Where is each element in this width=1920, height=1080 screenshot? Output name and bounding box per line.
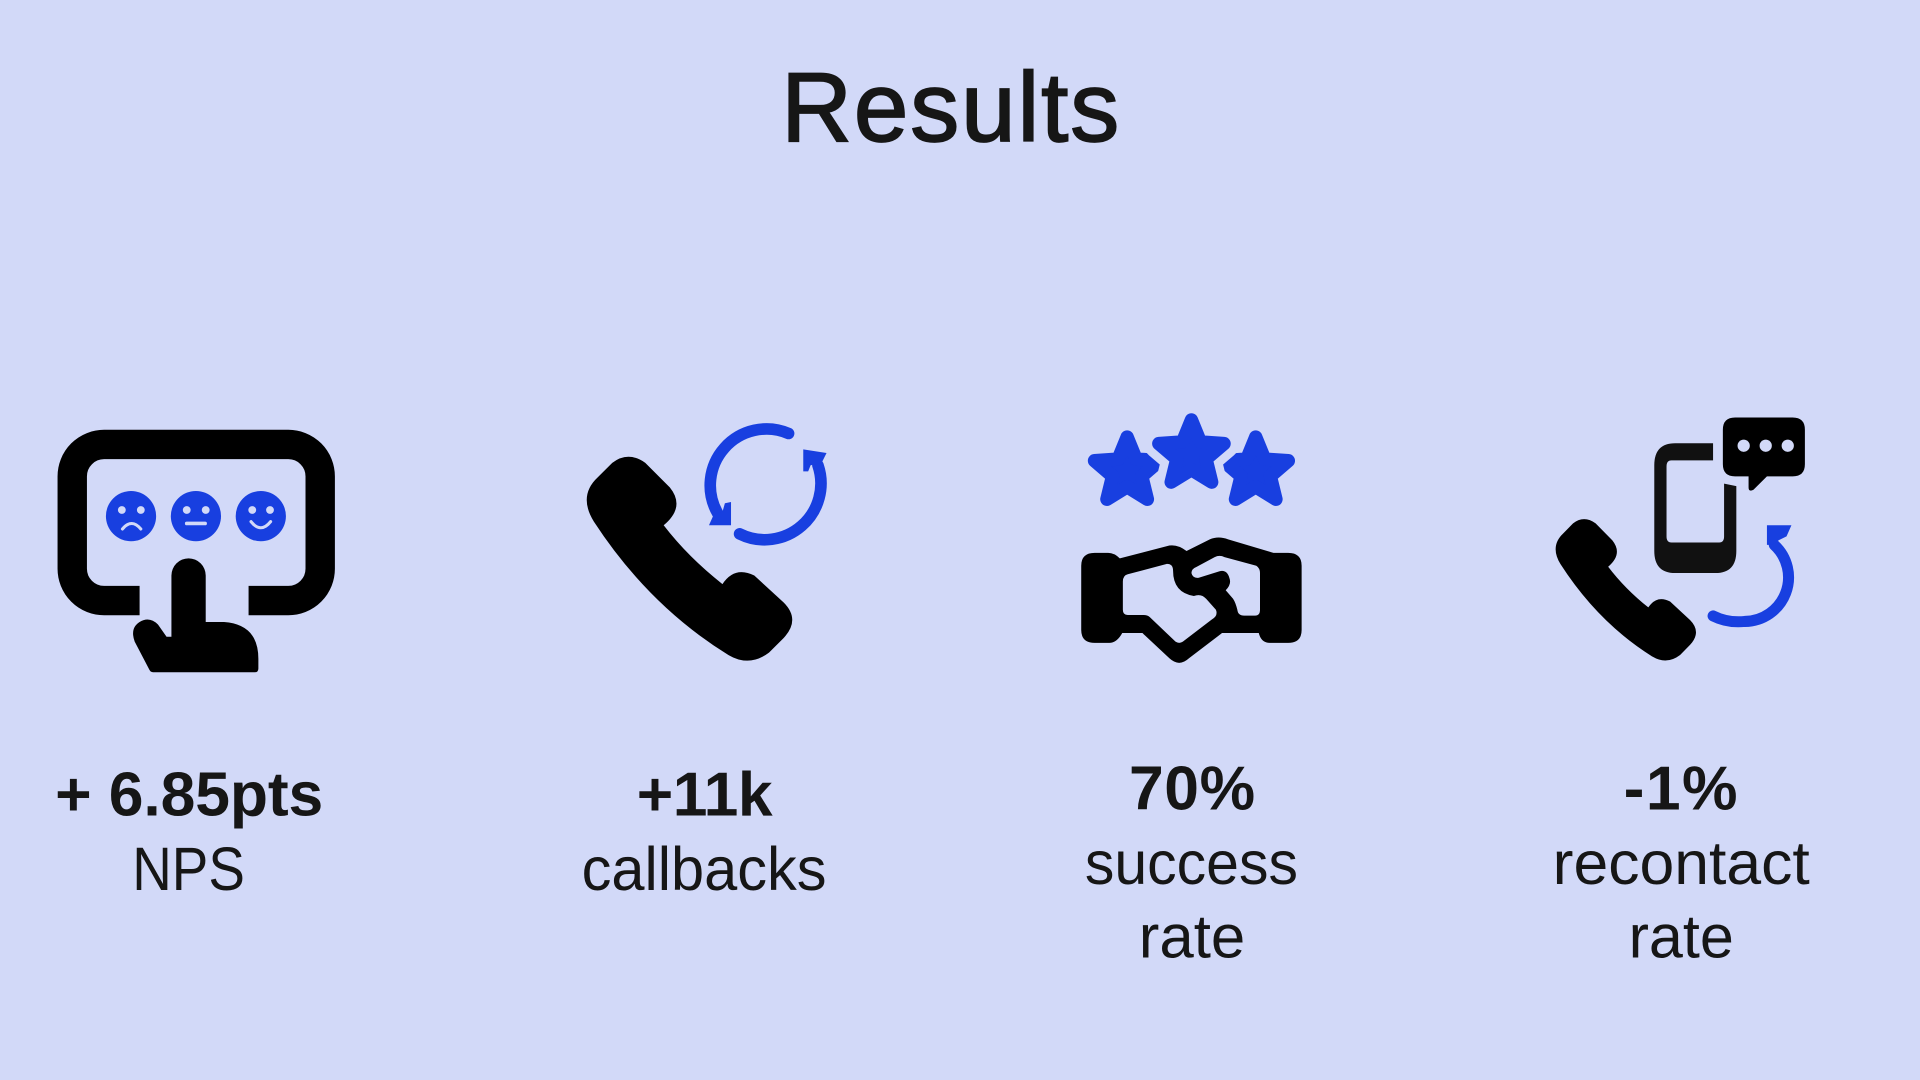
three stars xyxy=(1095,420,1288,499)
neutral face xyxy=(171,491,221,541)
value: success rate: 70% xyxy=(1129,753,1255,823)
label: NPS: NPS xyxy=(132,835,245,903)
icon: phone with refresh arrows xyxy=(587,429,827,661)
handset xyxy=(1556,519,1696,661)
icon: stars over handshake xyxy=(1081,420,1302,663)
value: callbacks: +11k xyxy=(637,760,773,830)
panel: success rate xyxy=(1081,420,1302,971)
label: success rate: success xyxy=(1085,829,1298,897)
panel: recontact rate xyxy=(1553,418,1810,971)
return arrow xyxy=(1713,525,1791,622)
value: recontact rate: -1% xyxy=(1624,753,1738,823)
panel: NPS xyxy=(55,444,323,903)
chat bubble xyxy=(1723,418,1805,491)
title: Results xyxy=(781,52,1119,162)
mobile device xyxy=(1654,443,1736,573)
sad face xyxy=(106,491,156,541)
panel: callbacks xyxy=(582,429,827,903)
refresh arrows xyxy=(709,429,827,540)
happy face xyxy=(236,491,286,541)
pointing hand xyxy=(133,558,258,672)
icon: satisfaction screen with pointing hand xyxy=(72,444,320,672)
icon: phone, mobile, chat bubble and arrow xyxy=(1556,418,1805,661)
screen frame xyxy=(72,444,320,601)
value: NPS: + 6.85pts xyxy=(55,760,323,830)
label line: rate: rate xyxy=(1629,903,1734,971)
handset xyxy=(587,457,792,661)
label: callbacks: callbacks xyxy=(582,835,827,903)
label line: rate: rate xyxy=(1139,903,1245,971)
label: recontact rate: recontact xyxy=(1553,829,1810,897)
handshake xyxy=(1081,538,1302,663)
